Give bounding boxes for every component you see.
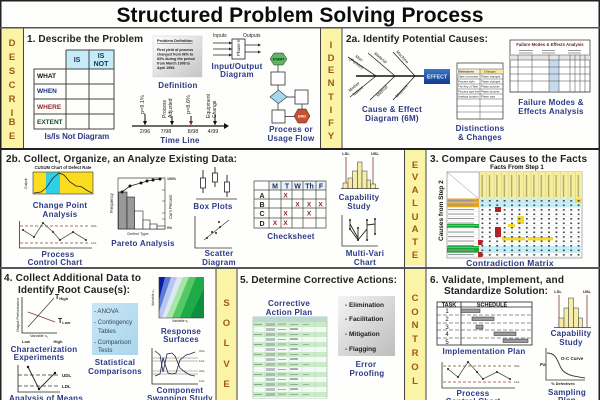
- distinctions and changes table: Process style: [458, 80, 475, 84]
- scatter diagram: [195, 216, 236, 267]
- panel: evaluate sidebar: [404, 150, 426, 266]
- multi-vari chart: Multi-Vari: [346, 249, 384, 258]
- panel: describe sidebar: D: [9, 38, 16, 49]
- implementation plan gantt chart: 4: [445, 332, 449, 338]
- checksheet: X: [283, 192, 288, 200]
- implementation plan gantt chart: 1: [445, 309, 449, 315]
- panel: describe sidebar: E: [9, 52, 15, 63]
- checksheet: Th: [305, 184, 314, 190]
- time line: 2/96: [140, 129, 150, 135]
- definition box: Problem Definition: [157, 38, 193, 43]
- panel: control sidebar: [404, 269, 426, 400]
- heading: step 5: 5. Determine Corrective Actions:: [240, 275, 397, 286]
- change point analysis: CUSUM Chart of Defect Rate: [35, 165, 92, 170]
- checksheet: A: [259, 193, 265, 200]
- implementation plan gantt chart: 2: [445, 317, 449, 323]
- panel: identify sidebar: E: [328, 65, 334, 76]
- characterization experiments: T: [58, 318, 62, 325]
- panel: identify sidebar: F: [328, 118, 334, 129]
- panel: control sidebar: L: [412, 376, 418, 387]
- panel: control sidebar: C: [412, 293, 419, 304]
- checksheet: F: [319, 184, 324, 190]
- panel: control sidebar: R: [412, 348, 419, 359]
- component swapping study: [147, 348, 213, 400]
- panel: evaluate sidebar: E: [412, 250, 418, 261]
- process control chart: Process: [42, 250, 75, 259]
- process control chart: LCL: [91, 241, 97, 245]
- sampling plan: Pa: [540, 362, 546, 367]
- title: Structured Problem Solving Process: [116, 4, 484, 27]
- time line: Time Line: [160, 136, 200, 145]
- component swapping study: UCL: [199, 349, 205, 353]
- corrective action plan: Action Plan: [266, 308, 312, 317]
- checksheet: C: [259, 211, 265, 218]
- panel: evaluate sidebar: T: [412, 237, 418, 248]
- characterization experiments: Variable x₁: [30, 334, 49, 338]
- definition box: April 1999.: [157, 66, 175, 70]
- panel: evaluate sidebar: E: [412, 160, 418, 171]
- checksheet: X: [283, 210, 288, 218]
- pareto analysis: 100%: [167, 177, 177, 181]
- panel: describe sidebar: [1, 28, 23, 148]
- capability study, control: LSL: [554, 289, 562, 294]
- characterization experiments: Experiments: [14, 353, 65, 362]
- panel: solve sidebar: E: [223, 379, 230, 390]
- definition box: [153, 36, 202, 90]
- panel: control sidebar: N: [412, 320, 419, 331]
- distinctions and changes table: The Key of Task: [458, 84, 479, 88]
- capability study: Study: [347, 202, 371, 211]
- panel: describe sidebar: S: [9, 66, 15, 77]
- distinctions and changes table: Phase process: [481, 90, 500, 94]
- distinctions and changes table: Analogs location: [458, 94, 479, 98]
- distinctions and changes table: Phase process: [481, 84, 500, 88]
- panel: control sidebar: O: [411, 362, 419, 373]
- box plots: [193, 167, 237, 211]
- process control chart, control: UCL: [514, 364, 520, 368]
- checksheet: Checksheet: [267, 232, 315, 241]
- statistical comparisons panel: Statistical: [95, 358, 135, 367]
- panel: solve sidebar: S: [223, 298, 230, 309]
- analysis of means chart: UDL: [62, 373, 71, 378]
- statistical comparisons panel: - ANOVA: [94, 308, 120, 315]
- error proofing: [338, 296, 395, 378]
- process control chart: [20, 221, 97, 267]
- cause and effect diagram: Nature: [351, 84, 365, 97]
- checksheet: W: [294, 184, 301, 190]
- panel: evaluate sidebar: V: [412, 172, 419, 183]
- panel: evaluate sidebar: A: [412, 224, 419, 235]
- process flow diagram: Process or: [269, 125, 313, 134]
- process flow diagram: Usage Flow: [268, 134, 315, 143]
- sampling plan: % Defectives: [551, 382, 575, 386]
- input/output diagram: Input/Output: [212, 62, 263, 71]
- contradiction matrix: Facts From Step 1: [490, 164, 544, 171]
- input/output diagram: Inputs: [213, 33, 227, 39]
- time line: 7/98: [161, 129, 171, 135]
- is/is not diagram: EXTENT: [37, 119, 63, 126]
- checksheet: X: [307, 210, 312, 218]
- is/is not diagram: IS: [74, 57, 81, 64]
- checksheet: B: [259, 202, 265, 209]
- statistical comparisons panel: Tables: [98, 328, 116, 335]
- characterization experiments: High: [59, 296, 69, 301]
- component swapping study: UCL: [199, 369, 205, 373]
- failure modes and effects analysis: [510, 40, 590, 116]
- capability study: [339, 151, 380, 211]
- process control chart: UCL: [91, 224, 97, 228]
- analysis of means chart: LDL: [62, 384, 71, 389]
- panel: describe sidebar: E: [9, 131, 15, 142]
- panel: identify sidebar: I: [330, 40, 332, 51]
- cause and effect diagram: Measure: [394, 83, 409, 99]
- sampling plan: O-C Curve: [561, 356, 584, 361]
- time line: Process: [162, 99, 168, 118]
- checksheet: [254, 181, 326, 241]
- process flow diagram: [268, 53, 315, 143]
- time line: p=9.1%: [140, 95, 146, 114]
- checksheet: X: [295, 202, 300, 208]
- heading: step 2b: 2b. Collect, Organize, an Analyze Existing Data:: [6, 154, 237, 165]
- error proofing: - Flagging: [345, 346, 376, 353]
- change point analysis: Output: [24, 178, 28, 189]
- response surfaces: Variable x₁: [172, 319, 189, 323]
- cause and effect diagram: Cause & Effect: [362, 105, 422, 114]
- panel: control sidebar: O: [411, 307, 419, 318]
- checksheet: X: [283, 220, 288, 227]
- cause and effect diagram: Diagram (6M): [365, 114, 419, 123]
- time line: Adjusted: [168, 98, 174, 118]
- distinctions and changes table: Process type line: [458, 90, 480, 94]
- input/output diagram: [212, 33, 263, 79]
- cause and effect diagram: Material: [373, 51, 388, 64]
- response surfaces: Variable x₂: [151, 289, 155, 306]
- heading: step 6: Standardize Solution:: [444, 286, 548, 297]
- characterization experiments: Low: [62, 320, 71, 325]
- process control chart: Control Chart: [28, 258, 82, 267]
- response surfaces: Response: [161, 327, 201, 336]
- panel: solve sidebar: V: [223, 359, 230, 370]
- pareto analysis: Defect Type: [127, 231, 149, 236]
- panel: solve sidebar: [216, 269, 237, 400]
- distinctions and changes table: Distinctions: [458, 70, 474, 74]
- error proofing: - Elimination: [345, 302, 384, 309]
- implementation plan gantt chart: SCHEDULE: [477, 302, 507, 308]
- component swapping study: LCL: [199, 359, 205, 363]
- panel: identify sidebar: T: [328, 92, 334, 103]
- panel: evaluate sidebar: L: [412, 198, 418, 209]
- capability study: USL: [371, 151, 380, 156]
- checksheet: D: [259, 221, 265, 228]
- failure modes and effects analysis: Failure Modes & Effects Analysis: [516, 42, 584, 47]
- change point analysis: Change Point: [33, 201, 87, 210]
- panel: describe sidebar: I: [11, 108, 13, 119]
- cause and effect diagram: (Person): [348, 57, 365, 70]
- capability study, control: USL: [583, 289, 592, 294]
- panel: identify sidebar: D: [328, 53, 335, 64]
- statistical comparisons panel: Comparisons: [88, 367, 142, 376]
- capability study: Capability: [339, 193, 380, 202]
- corrective action plan: [253, 299, 327, 398]
- panel: solve sidebar: L: [224, 338, 230, 349]
- heading: step 3: 3. Compare Causes to the Facts: [430, 154, 587, 165]
- panel: control sidebar: T: [412, 334, 418, 345]
- time line: Change: [212, 100, 218, 118]
- checksheet: X: [273, 220, 278, 227]
- is/is not diagram: WHEN: [37, 88, 57, 95]
- checksheet: X: [318, 202, 323, 208]
- capability study: LSL: [342, 151, 350, 156]
- checksheet: M: [272, 184, 278, 190]
- cause and effect diagram: EFFECT: [427, 74, 448, 80]
- implementation plan gantt chart: TASK: [442, 302, 456, 308]
- checksheet: T: [285, 184, 290, 190]
- time line: [132, 93, 229, 145]
- scatter diagram: Diagram: [202, 258, 236, 267]
- characterization experiments: [11, 294, 77, 362]
- time line: p=8.6%: [186, 95, 192, 114]
- distinctions and changes table: Phase changes: [481, 74, 501, 78]
- input/output diagram: Diagram: [220, 70, 254, 79]
- characterization experiments: Low: [22, 339, 31, 344]
- panel: identify sidebar: N: [328, 78, 335, 89]
- capability study, control: Study: [559, 338, 583, 347]
- panel: describe sidebar: R: [9, 94, 16, 105]
- heading: step 4: Identify Root Cause(s):: [18, 285, 130, 296]
- process control chart, control: [442, 361, 520, 400]
- definition box: changed from 96% to: [157, 52, 194, 56]
- component swapping study: Component: [157, 386, 203, 395]
- distinctions and changes table: Phase changes: [481, 80, 501, 84]
- cause and effect diagram: [347, 49, 450, 123]
- capability study, control: [551, 289, 592, 347]
- heading: step 6: [430, 275, 564, 297]
- implementation plan gantt chart: 5: [445, 340, 449, 346]
- is/is not diagram: WHAT: [37, 73, 56, 80]
- error proofing: - Mitigation: [345, 331, 380, 338]
- cause and effect diagram: Method: [375, 84, 389, 98]
- panel: evaluate sidebar: A: [412, 185, 419, 196]
- panel: solve sidebar: O: [223, 318, 230, 329]
- corrective action plan: Corrective: [268, 299, 310, 308]
- time line: 8/98: [188, 129, 198, 135]
- panel: identify sidebar: Y: [328, 131, 335, 142]
- input/output diagram: Outputs: [243, 33, 261, 39]
- is/is not diagram: [34, 50, 114, 141]
- statistical comparisons panel: - Comparison: [94, 339, 132, 346]
- heading: step 4: [4, 273, 141, 296]
- failure modes and effects analysis: Effects Analysis: [518, 107, 584, 116]
- characterization experiments: T: [55, 294, 59, 301]
- pareto analysis: 0%: [167, 226, 173, 230]
- process flow diagram: END: [298, 114, 306, 118]
- input/output diagram: Phase II: [236, 39, 241, 56]
- checksheet: X: [307, 202, 312, 208]
- pareto analysis: Frequency: [109, 192, 114, 213]
- analysis of means chart: [9, 365, 83, 400]
- multi-vari chart: Chart: [354, 258, 376, 267]
- statistical comparisons panel: [88, 303, 142, 376]
- time line: 4/99: [208, 129, 218, 135]
- distinctions and changes table: Phase type: [481, 94, 495, 98]
- panel: evaluate sidebar: U: [412, 212, 419, 223]
- panel: identify sidebar: I: [330, 105, 332, 116]
- definition box: from March 1998 to: [157, 62, 191, 66]
- panel: describe sidebar: C: [9, 80, 16, 91]
- response surfaces: [151, 277, 204, 344]
- definition box: 83% during the period: [157, 57, 195, 61]
- distinctions and changes table: State of process: [458, 74, 479, 78]
- sampling plan: Sampling: [548, 388, 586, 397]
- is/is not diagram: Is/Is Not Diagram: [44, 132, 110, 141]
- process control chart, control: LCL: [514, 380, 520, 384]
- implementation plan gantt chart: [437, 302, 532, 356]
- cause and effect diagram: Man: [354, 54, 365, 63]
- definition box: Definition: [158, 81, 198, 90]
- contradiction matrix: Contradiction Matrix: [466, 258, 554, 268]
- is/is not diagram: WHERE: [37, 104, 62, 111]
- pareto analysis: [109, 177, 177, 248]
- characterization experiments: High: [54, 339, 63, 344]
- process flow diagram: START: [273, 58, 285, 62]
- component swapping study: LCL: [199, 379, 205, 383]
- response surfaces: Surfaces: [163, 335, 199, 344]
- characterization experiments: Output Performance: [16, 298, 20, 332]
- pareto analysis: Cum Percent: [168, 194, 173, 219]
- scatter diagram: Scatter: [205, 249, 233, 258]
- change point analysis: Analysis: [43, 210, 78, 219]
- contradiction matrix: Causes from Step 2: [438, 180, 445, 241]
- error proofing: Error: [356, 360, 376, 369]
- error proofing: - Facilitation: [345, 316, 383, 323]
- distinctions and changes table: Distinctions: [456, 124, 505, 133]
- process control chart, control: Process: [457, 389, 490, 398]
- error proofing: Proofing: [350, 369, 384, 378]
- implementation plan gantt chart: 3: [445, 325, 449, 331]
- is/is not diagram: IS: [98, 53, 105, 60]
- characterization experiments: Characterization: [11, 345, 77, 354]
- contradiction matrix: [438, 164, 582, 268]
- distinctions and changes table: Changes: [484, 70, 496, 74]
- distinctions and changes table: [456, 63, 505, 142]
- statistical comparisons panel: Tests: [98, 347, 112, 354]
- time line: Equipment: [206, 93, 212, 118]
- heading: step 6: 6. Validate, Implement, and: [430, 275, 564, 286]
- multi-vari chart: [342, 215, 384, 267]
- panel: describe sidebar: B: [9, 117, 16, 128]
- distinctions and changes table: & Changes: [458, 133, 502, 142]
- heading: step 2a: 2a. Identify Potential Causes:: [346, 34, 488, 45]
- cause and effect diagram: Machine: [395, 49, 410, 65]
- capability study, control: Capability: [551, 329, 592, 338]
- change point analysis: [24, 165, 93, 219]
- failure modes and effects analysis: Failure Modes &: [518, 98, 584, 107]
- cause and effect diagram: Mother: [347, 80, 361, 93]
- heading: step 4: 4. Collect Additional Data to: [4, 273, 141, 284]
- heading: step 1: 1. Describe the Problem: [27, 34, 143, 45]
- is/is not diagram: NOT: [94, 61, 109, 68]
- pareto analysis: Pareto Analysis: [111, 239, 175, 248]
- statistical comparisons panel: - Contingency: [94, 319, 133, 326]
- sampling plan: [540, 348, 586, 400]
- box plots: Box Plots: [193, 202, 233, 211]
- implementation plan gantt chart: Implementation Plan: [443, 347, 525, 356]
- panel: identify sidebar: [320, 28, 342, 148]
- definition box: First yield of process: [157, 48, 193, 52]
